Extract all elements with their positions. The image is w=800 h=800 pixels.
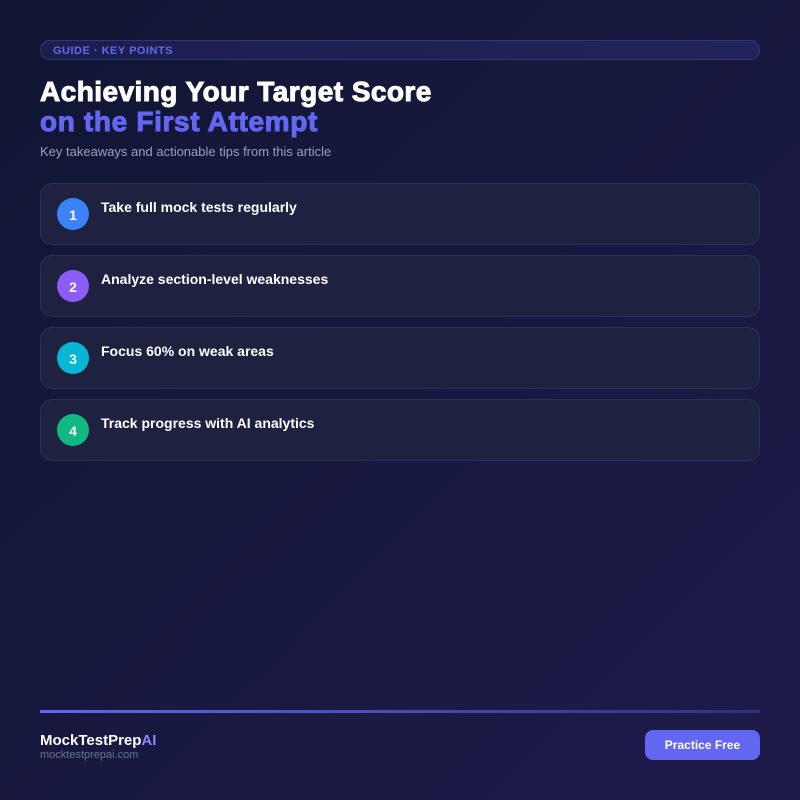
icon: number 3: 3	[69, 351, 77, 367]
panel: tip 2	[40, 255, 760, 317]
icon: number 1	[57, 198, 89, 230]
button: practice free: Practice Free	[665, 738, 740, 752]
title line 1: Achieving Your Target Score	[40, 76, 432, 107]
icon: number 2	[57, 270, 89, 302]
icon: number 3	[57, 342, 89, 374]
brand url: mocktestprepai.com	[40, 749, 138, 761]
tip 3 text: Focus 60% on weak areas	[101, 343, 274, 359]
tip 4 text: Track progress with AI analytics	[101, 415, 314, 431]
icon: number 1: 1	[69, 207, 77, 223]
badge: guide key points: GUIDE · KEY POINTS	[53, 45, 173, 57]
tip 1 text: Take full mock tests regularly	[101, 199, 297, 215]
brand name: MockTestPrepAI	[40, 732, 156, 749]
subtitle: Key takeaways and actionable tips from this article	[40, 144, 331, 159]
panel: tip 4	[40, 399, 760, 461]
icon: number 4	[57, 414, 89, 446]
icon: number 2: 2	[69, 279, 77, 295]
panel: tip 3	[40, 327, 760, 389]
footer accent line	[40, 710, 760, 713]
tip 2 text: Analyze section-level weaknesses	[101, 271, 328, 287]
title line 2: on the First Attempt	[40, 106, 318, 137]
icon: number 4: 4	[69, 423, 77, 439]
panel: tip 1	[40, 183, 760, 245]
button: practice free	[645, 730, 760, 760]
brand	[40, 732, 156, 761]
title	[40, 76, 432, 138]
badge: guide key points	[40, 40, 760, 60]
